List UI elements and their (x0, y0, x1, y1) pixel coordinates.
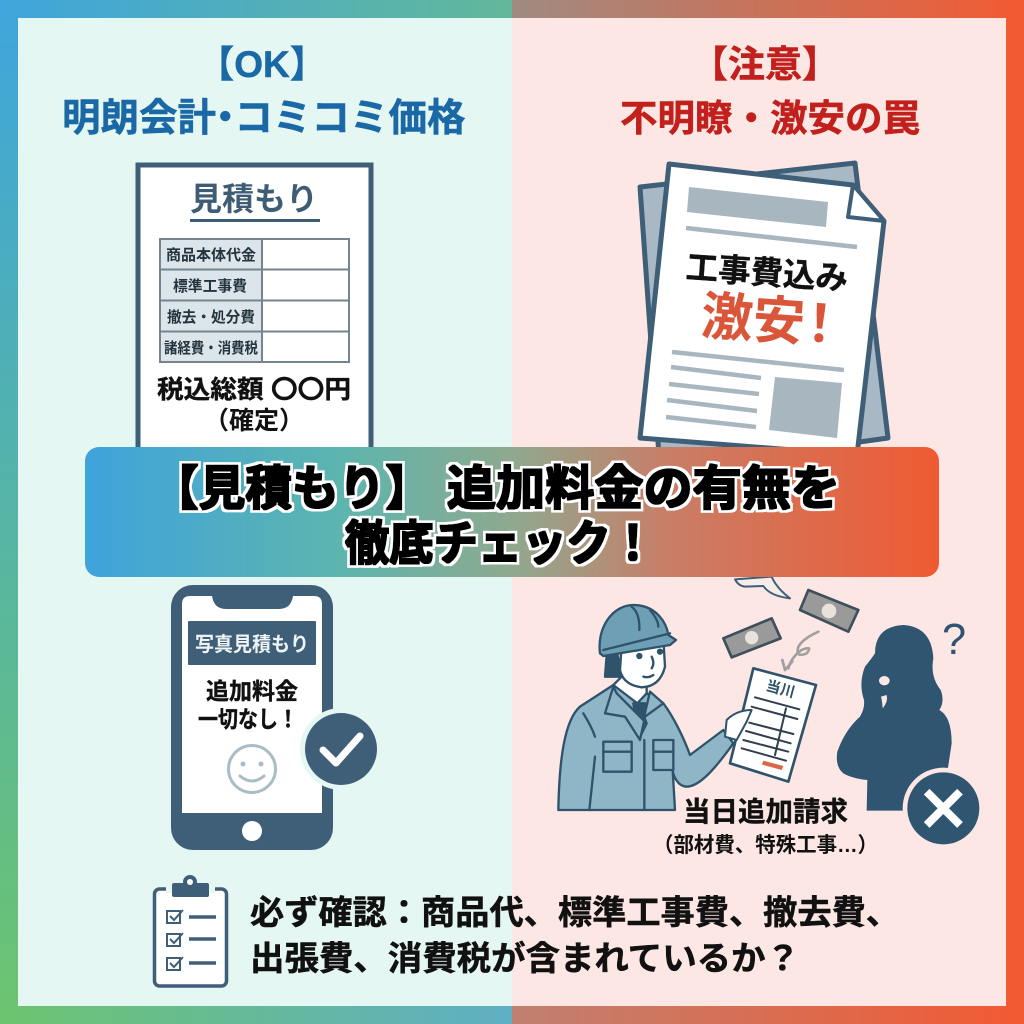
estimate document: （確定） (204, 407, 304, 435)
icon: check badge (300, 708, 382, 790)
icon: clipboard (154, 875, 226, 986)
title banner (85, 447, 939, 577)
customer silhouette (837, 616, 966, 811)
falling banknotes (723, 577, 858, 670)
estimate table: 標準工事費 (173, 277, 247, 295)
title banner: 追加料金の有無を (447, 463, 840, 516)
estimate table (160, 239, 349, 362)
estimate document: 見積もり (190, 181, 318, 217)
scene caption: （部材費、特殊工事…） (653, 833, 878, 857)
smartphone with check badge: 追加料金 (206, 678, 298, 704)
icon: smiley (228, 746, 276, 792)
heading: OK (62, 44, 466, 140)
smartphone with check badge (171, 585, 382, 850)
customer silhouette: ? (942, 616, 966, 664)
icon: X badge (903, 768, 984, 849)
invoice (725, 668, 816, 782)
checklist note (250, 895, 900, 978)
smartphone with check badge: 写真見積もり (195, 633, 309, 656)
scene caption: 当日追加請求 (683, 796, 848, 827)
estimate table: 撤去・処分費 (167, 308, 255, 326)
heading: caution (620, 44, 920, 139)
checklist note: 出張費、消費税が含まれているか？ (250, 940, 800, 978)
scene caption (653, 796, 878, 857)
heading: caution: 不明瞭・激安の罠 (620, 98, 920, 139)
heading: caution: 【注意】 (691, 44, 839, 85)
invoice: 当川 (764, 676, 797, 701)
estimate document (138, 165, 371, 455)
title banner: 【見積もり】 (152, 463, 432, 516)
worker (558, 605, 733, 810)
flyer stack (640, 163, 888, 470)
checklist note: 必ず確認：商品代、標準工事費、撤去費、 (250, 895, 900, 932)
estimate table: 諸経費・消費税 (164, 339, 258, 357)
panel: OK side (18, 18, 512, 1006)
heading: OK: 【OK】 (197, 44, 327, 85)
title banner: 徹底チェック！ (345, 518, 655, 571)
estimate document: 税込総額 〇〇円 (157, 376, 351, 404)
panel: caution side (512, 18, 1006, 1006)
smartphone with check badge: 一切なし！ (198, 706, 298, 732)
heading: OK: 明朗会計・コミコミ価格 (62, 97, 466, 140)
flyer stack: 工事費込み (685, 249, 849, 297)
estimate table: 商品本体代金 (166, 246, 256, 264)
flyer stack: 激安！ (699, 288, 848, 356)
scene: worker with invoice and customer (558, 577, 984, 849)
